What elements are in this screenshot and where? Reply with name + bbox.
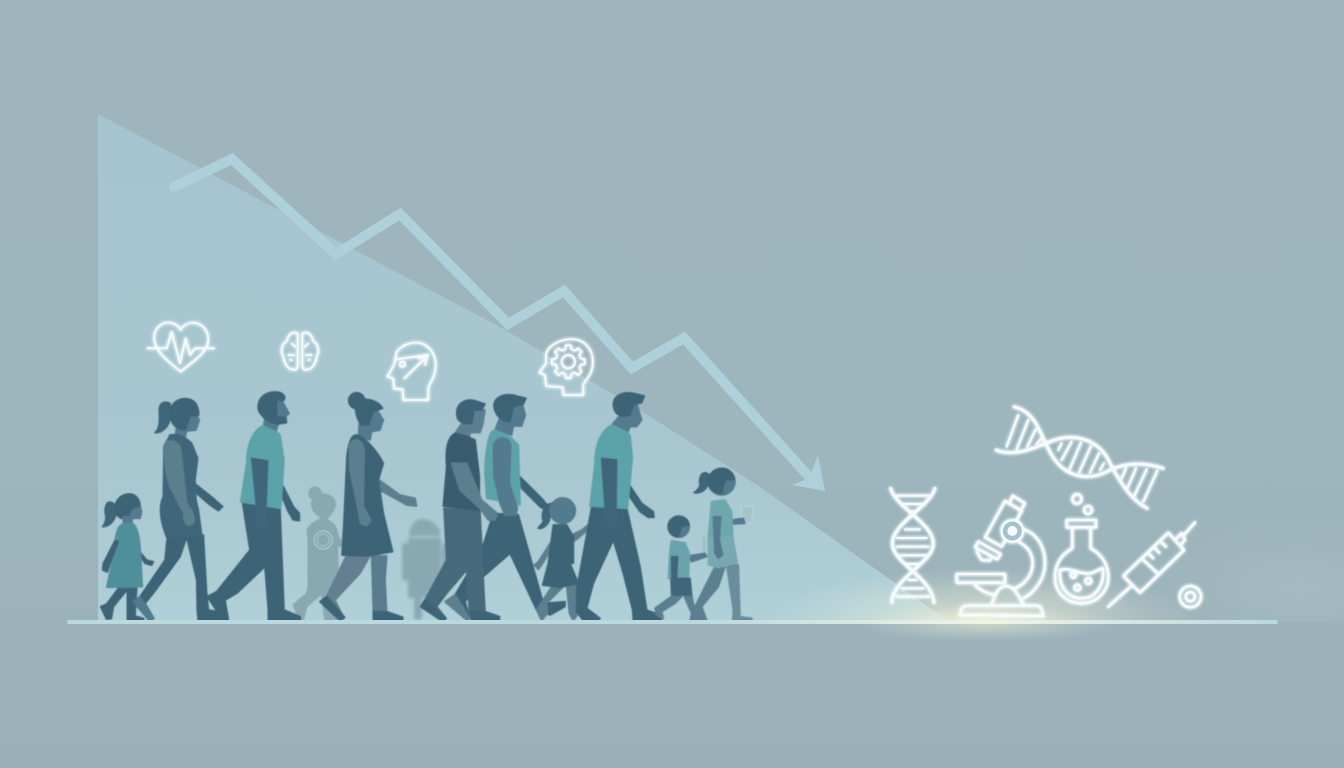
man in teal tank top (445, 395, 565, 620)
declining area triangle (98, 114, 950, 622)
tall man in teal shirt (577, 393, 662, 622)
ghost figure: faded child (293, 487, 342, 620)
bearded man in teal shirt (207, 392, 301, 621)
people walking, right group (421, 393, 753, 622)
health and cognition line icons (147, 323, 593, 400)
icon: target dot (1180, 586, 1201, 607)
ground line (67, 620, 1278, 624)
girl in dark dress (534, 498, 590, 621)
woman in dark top (133, 399, 228, 621)
bright ground segment (700, 620, 1270, 624)
glow below ground line (855, 606, 1115, 642)
glow behind science icons (814, 576, 1167, 620)
icon: head with gear (539, 339, 593, 395)
woman in dark dress (320, 393, 417, 621)
illustration: declining population and science icons (67, 114, 1278, 638)
girl in teal dress (101, 494, 153, 621)
icon: heart with pulse (147, 323, 214, 372)
icon: head with rising arrow (387, 343, 436, 400)
man in dark t-shirt (421, 400, 499, 622)
ghost figure: faded robot (402, 519, 448, 620)
science line icons (891, 407, 1201, 616)
icon: horizontal DNA helix (996, 407, 1163, 508)
icon: syringe (1108, 522, 1195, 607)
declining trend arrow (169, 159, 825, 491)
icon: flask with bubbles (1055, 494, 1108, 603)
people walking, left group (101, 392, 417, 621)
boy in teal shirt (655, 516, 707, 622)
icon: brain (282, 333, 318, 370)
icon: microscope (957, 496, 1045, 616)
girl holding a cup (693, 468, 753, 621)
right side haze (1286, 584, 1314, 596)
icon: vertical DNA helix (891, 488, 935, 603)
